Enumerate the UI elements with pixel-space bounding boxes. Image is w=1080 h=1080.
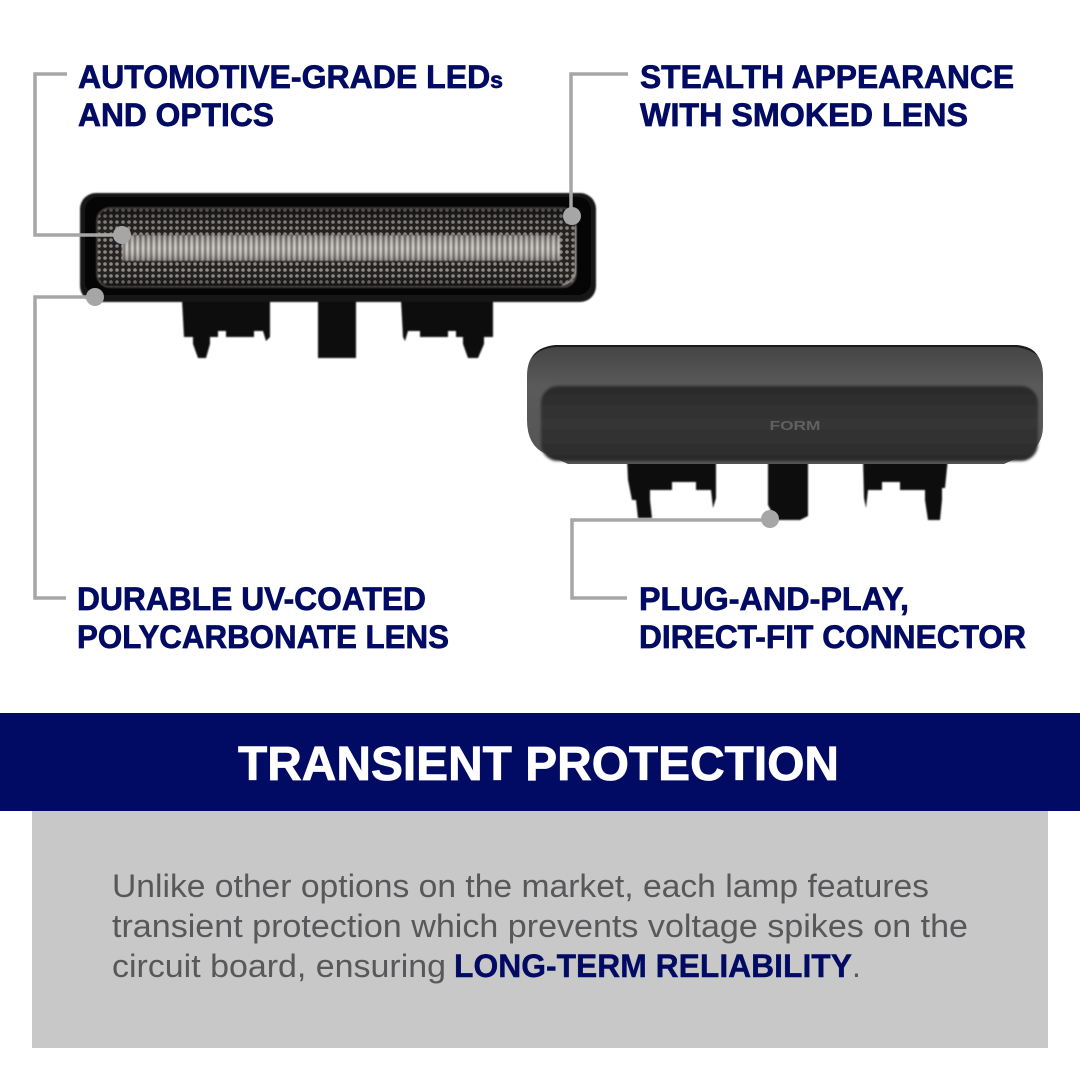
callout: durable lens xyxy=(35,288,449,655)
callout text: DIRECT-FIT CONNECTOR xyxy=(639,619,1026,655)
rear lamp tabs and connector xyxy=(627,458,948,520)
banner heading: TRANSIENT PROTECTION xyxy=(238,738,839,791)
leader dot xyxy=(563,207,581,225)
leader line xyxy=(572,520,770,598)
callout text: DURABLE UV-COATED xyxy=(77,581,426,617)
callout text: POLYCARBONATE LENS xyxy=(77,619,449,655)
LED strip xyxy=(122,235,560,261)
banner: transient protection xyxy=(0,713,1080,811)
callout: automotive-grade LEDs xyxy=(35,59,503,244)
description text: transient protection which prevents voltage spikes on the xyxy=(112,908,968,944)
callout: stealth appearance xyxy=(563,59,1014,225)
description text: circuit board, ensuring xyxy=(112,948,446,984)
leader dot xyxy=(761,510,779,528)
lamp mounting tabs and connector xyxy=(182,300,493,358)
callout text: AUTOMOTIVE-GRADE LEDs xyxy=(78,59,503,95)
description text: LONG-TERM RELIABILITY xyxy=(454,948,852,984)
callout text xyxy=(77,581,449,655)
callout text xyxy=(639,581,1026,655)
leader dot xyxy=(86,288,104,306)
callout text: STEALTH APPEARANCE xyxy=(640,59,1014,95)
lamp: front view with smoked lens xyxy=(80,193,596,358)
lamp housing xyxy=(80,193,596,302)
leader line xyxy=(35,297,95,598)
description text: Unlike other options on the market, each lamp features xyxy=(112,868,929,904)
leader dot xyxy=(113,226,131,244)
callout: plug-and-play connector xyxy=(572,510,1026,655)
description text xyxy=(112,868,968,984)
rear lamp upper body xyxy=(527,345,1043,464)
lamp: rear view xyxy=(527,345,1043,520)
callout text xyxy=(78,59,503,133)
smoked lens xyxy=(97,208,576,287)
callout text: PLUG-AND-PLAY, xyxy=(639,581,909,617)
panel: description xyxy=(32,811,1048,1048)
FORM logo: FORM xyxy=(770,418,820,433)
callout text: WITH SMOKED LENS xyxy=(640,97,968,133)
description text: . xyxy=(852,948,861,984)
lens edge reflection xyxy=(562,226,576,285)
rear lamp face xyxy=(541,386,1038,461)
callout text xyxy=(640,59,1014,133)
leader line xyxy=(35,74,122,235)
leader line xyxy=(571,74,628,216)
callout text: AND OPTICS xyxy=(78,97,274,133)
